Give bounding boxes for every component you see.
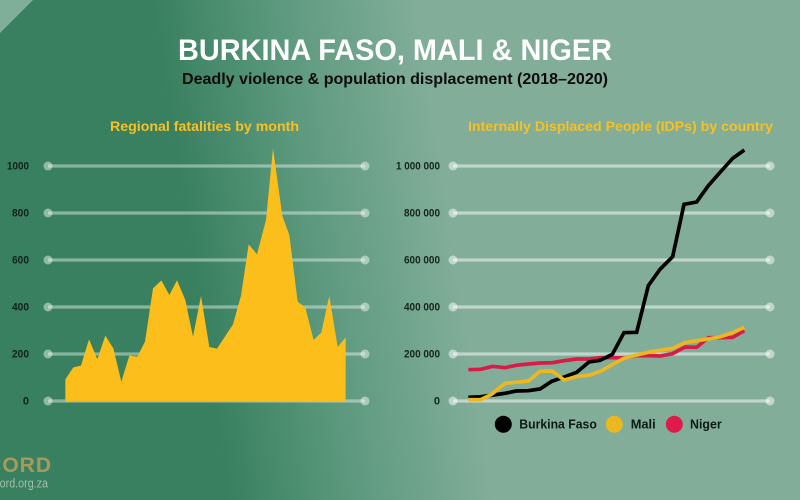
panel: internally displaced people by country: [396, 118, 774, 433]
heading: fatalities chart: Regional fatalities by month: [110, 118, 299, 134]
y axis labels: 800 000: [404, 208, 440, 220]
y axis labels: 400: [12, 302, 29, 314]
y axis labels: 800: [12, 208, 29, 220]
y axis labels: [7, 160, 29, 408]
line: Burkina Faso: [468, 150, 744, 397]
y axis labels: 600: [12, 254, 29, 266]
legend item: Niger: [666, 416, 722, 433]
y axis gridlines: [44, 162, 370, 406]
y axis labels: 200 000: [404, 348, 440, 360]
y axis labels: 200: [12, 348, 29, 360]
title: BURKINA FASO, MALI & NIGER: [178, 34, 612, 67]
y axis gridlines: [448, 162, 774, 406]
logo: ACCORD: [0, 454, 52, 490]
y axis labels: 1 000 000: [396, 160, 440, 172]
legend item: Burkina Faso: [495, 416, 597, 433]
line: Niger: [468, 331, 744, 370]
y axis labels: 600 000: [404, 254, 440, 266]
legend item: Burkina Faso: Burkina Faso: [519, 417, 597, 432]
y axis labels: 1000: [7, 160, 29, 172]
legend item: Mali: Mali: [631, 417, 656, 432]
legend item: Niger: Niger: [690, 417, 722, 432]
line: Mali: [468, 327, 744, 400]
line chart: IDPs: [468, 150, 744, 400]
y axis labels: 0: [434, 396, 440, 408]
y axis labels: 400 000: [404, 302, 440, 314]
panel: regional fatalities by month: [7, 118, 370, 408]
y axis labels: 0: [23, 396, 29, 408]
y axis labels: [396, 160, 440, 408]
subtitle: Deadly violence & population displacement (2018–2020): [182, 71, 608, 88]
legend: [495, 416, 722, 433]
heading: IDP chart: Internally Displaced People (IDPs) by country: [468, 118, 773, 134]
legend item: Mali: [606, 416, 656, 433]
area chart: fatalities: [65, 148, 346, 402]
